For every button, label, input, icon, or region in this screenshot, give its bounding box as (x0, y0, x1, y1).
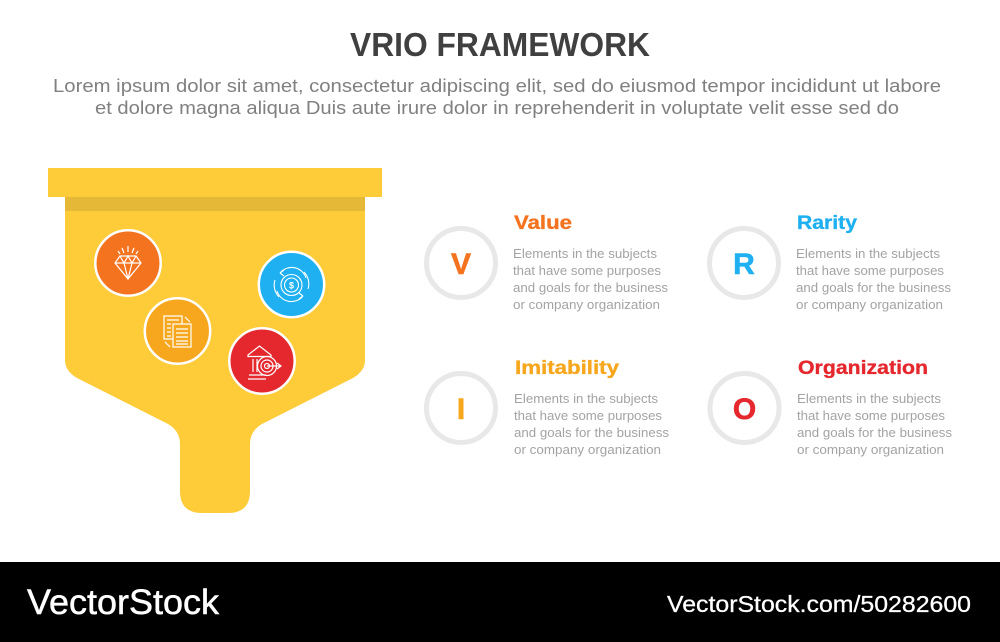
organization letter: O (733, 393, 756, 426)
value description: Elements in the subjects (513, 246, 658, 261)
rarity description: Elements in the subjects (796, 246, 941, 261)
organization ring (710, 374, 779, 442)
intro text: et dolore magna aliqua Duis aute irure dolor in reprehenderit in voluptate velit esse sed do (95, 97, 899, 118)
imitability description: that have some purposes (514, 408, 662, 423)
organization description: Elements in the subjects (797, 391, 942, 406)
title: VRIO FRAMEWORK (350, 26, 650, 63)
item: imitability (426, 358, 669, 457)
rarity letter: R (733, 248, 755, 281)
item: rarity (710, 213, 951, 312)
imitability description: or company organization (514, 442, 661, 457)
icon: diamond (95, 230, 161, 296)
rarity heading: Rarity (797, 213, 857, 234)
funnel (48, 168, 382, 513)
rarity description (796, 246, 951, 312)
organization description: that have some purposes (797, 408, 945, 423)
footer url: VectorStock.com/50282600 (667, 591, 971, 617)
footer logo: VectorStock (27, 583, 220, 622)
intro text: Lorem ipsum dolor sit amet, consectetur adipiscing elit, sed do eiusmod tempor incididunt ut labore (53, 75, 941, 96)
value heading: Value (514, 213, 572, 234)
value description: that have some purposes (513, 263, 661, 278)
rarity ring (710, 228, 778, 298)
icon: money cycle (259, 252, 324, 317)
imitability description: and goals for the business (514, 425, 669, 440)
rarity description: that have some purposes (796, 263, 944, 278)
rarity description: or company organization (796, 297, 943, 312)
value letter: V (451, 248, 471, 281)
intro text (53, 75, 941, 118)
funnel rim (48, 168, 382, 197)
imitability heading: Imitability (515, 358, 620, 379)
organization description: and goals for the business (797, 425, 952, 440)
value description: and goals for the business (513, 280, 668, 295)
imitability letter: I (457, 393, 465, 426)
item: value (426, 213, 668, 312)
organization description: or company organization (797, 442, 944, 457)
icon: bank target (229, 328, 295, 394)
imitability description (514, 391, 669, 457)
rarity description: and goals for the business (796, 280, 951, 295)
value description: or company organization (513, 297, 660, 312)
organization heading: Organization (798, 358, 928, 379)
footer bar (0, 562, 1000, 642)
organization description (797, 391, 952, 457)
value description (513, 246, 668, 312)
value ring (426, 228, 496, 298)
funnel shadow band (65, 197, 365, 211)
item: organization (710, 358, 952, 457)
funnel body (65, 190, 365, 513)
imitability ring (426, 374, 496, 442)
icon: money cycle: $ (289, 280, 294, 290)
icon: documents (145, 298, 210, 364)
imitability description: Elements in the subjects (514, 391, 659, 406)
